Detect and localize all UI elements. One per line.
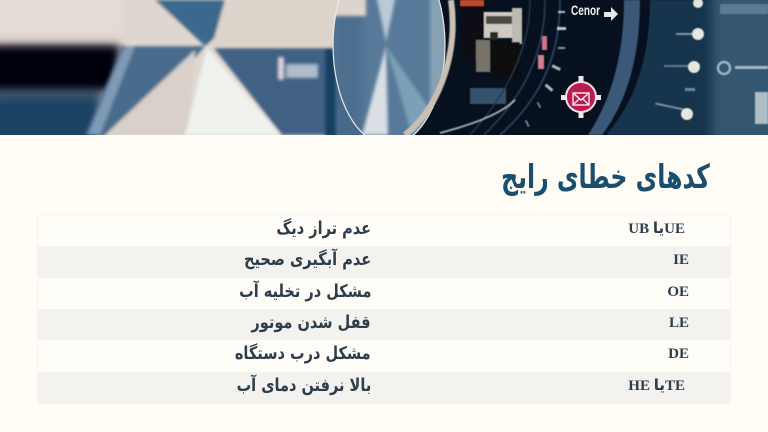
row: UE/UB	[276, 218, 685, 239]
icon: error badge	[561, 76, 601, 118]
row: LE: قفل شدن موتور	[252, 313, 371, 333]
icon: arrow	[604, 7, 618, 21]
row: UE/UB: UEیا UB	[628, 221, 685, 237]
faint logo	[278, 57, 318, 80]
error code table	[38, 215, 730, 403]
row: UE/UB: عدم تراز دیگ	[276, 219, 371, 239]
row: DE: مشکل درب دستگاه	[235, 344, 371, 364]
row: IE	[38, 246, 730, 278]
blue arc and right panel	[588, 0, 768, 135]
row: DE	[235, 343, 689, 364]
row: IE: IE	[673, 252, 689, 268]
row: TE/HE: بالا نرفتن دمای آب	[236, 376, 371, 396]
steel dial disc	[334, 0, 444, 135]
mechanical ring	[440, 0, 566, 135]
hero photo: washing machine control dial	[0, 0, 768, 135]
right side indicators	[655, 0, 768, 124]
row: TE/HE: TEیا HE	[628, 378, 685, 394]
row: DE: DE	[668, 346, 689, 362]
row: OE: OE	[667, 284, 689, 300]
row: LE	[38, 309, 730, 340]
row: LE: LE	[669, 315, 689, 331]
row: OE: مشکل در تخلیه آب	[239, 282, 371, 302]
title: کدهای خطای رایج	[501, 157, 710, 196]
dial label: Cenor	[571, 3, 601, 18]
row: IE: عدم آبگیری صحیح	[244, 250, 371, 270]
row: OE	[239, 280, 689, 302]
left blurred part	[0, 0, 125, 144]
dark right panel	[405, 0, 768, 135]
row: TE/HE	[38, 372, 730, 403]
